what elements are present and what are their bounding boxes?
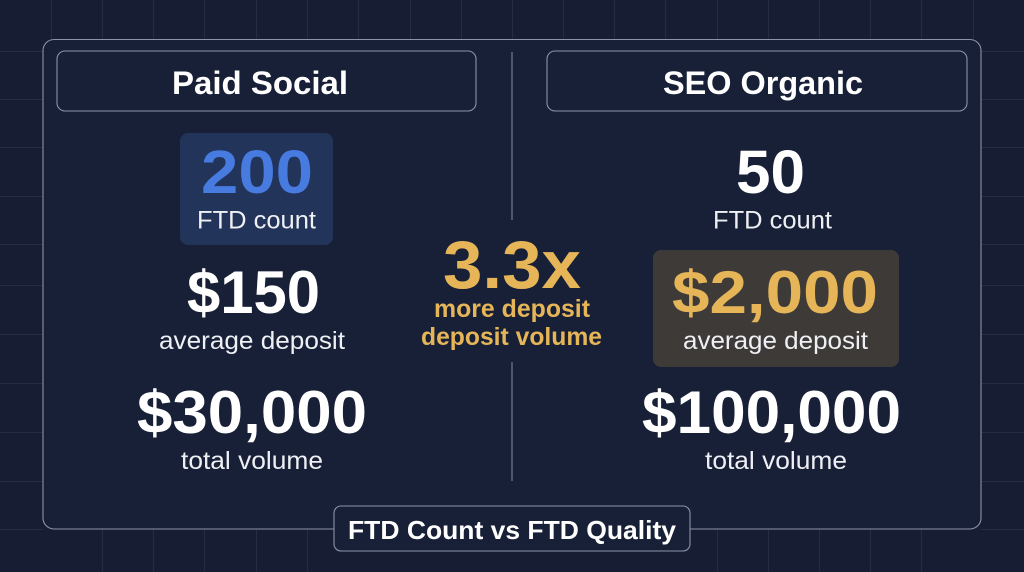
metric: average deposit bbox=[159, 259, 345, 355]
metric: average deposit: average deposit bbox=[159, 327, 345, 355]
metric: FTD count highlighted: 200 bbox=[201, 138, 313, 206]
metric: average deposit highlighted: $2,000 bbox=[672, 259, 878, 326]
metric: total volume: total volume bbox=[181, 447, 323, 475]
panel: comparison frame bbox=[43, 40, 981, 529]
footer label: FTD Count vs FTD Quality bbox=[334, 506, 690, 551]
metric: total volume bbox=[642, 379, 901, 475]
panel: Paid Social column bbox=[57, 51, 476, 475]
heading: SEO Organic bbox=[547, 51, 967, 111]
metric: average deposit highlighted bbox=[653, 250, 899, 367]
callout: 3.3x more deposit volume bbox=[421, 227, 602, 351]
metric: average deposit highlighted: average deposit bbox=[683, 327, 868, 355]
metric: FTD count highlighted bbox=[180, 133, 333, 245]
metric: total volume: $30,000 bbox=[137, 379, 367, 446]
center divider bbox=[511, 52, 513, 481]
metric: FTD count bbox=[713, 138, 832, 234]
metric: total volume bbox=[137, 379, 367, 475]
heading: SEO Organic: SEO Organic bbox=[663, 65, 863, 101]
metric: FTD count: 50 bbox=[736, 138, 805, 206]
footer label: FTD Count vs FTD Quality: FTD Count vs FTD Quality bbox=[348, 515, 677, 545]
metric: FTD count highlighted: FTD count bbox=[197, 206, 316, 234]
callout: 3.3x more deposit volume: deposit volume bbox=[421, 323, 602, 351]
callout: 3.3x more deposit volume: 3.3x bbox=[443, 227, 581, 303]
metric: total volume: total volume bbox=[705, 447, 847, 475]
metric: average deposit: $150 bbox=[187, 259, 320, 326]
callout: 3.3x more deposit volume: more deposit bbox=[434, 295, 591, 323]
metric: total volume: $100,000 bbox=[642, 379, 901, 446]
heading: Paid Social: Paid Social bbox=[172, 65, 348, 101]
panel: SEO Organic column bbox=[547, 51, 967, 475]
metric: FTD count: FTD count bbox=[713, 206, 832, 234]
heading: Paid Social bbox=[57, 51, 476, 111]
